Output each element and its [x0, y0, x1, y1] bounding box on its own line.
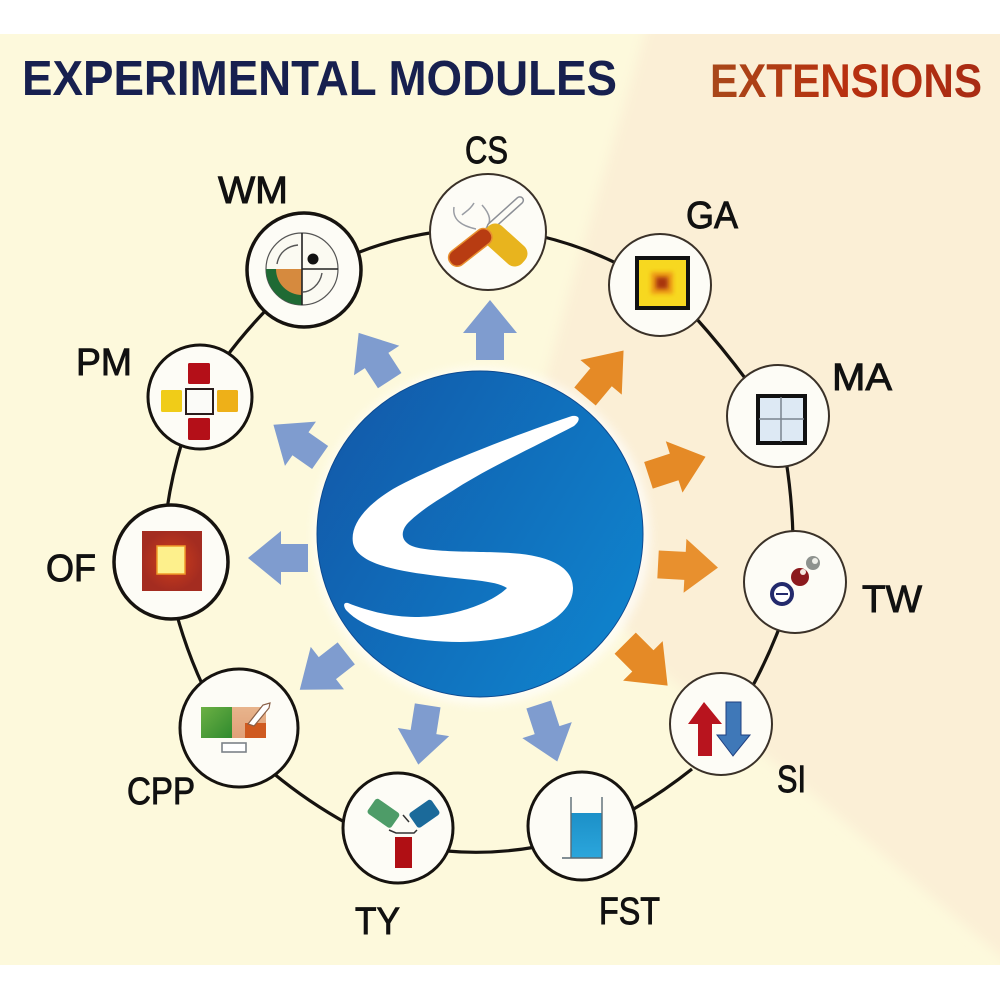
node: GA	[609, 234, 711, 336]
node: CPP	[180, 669, 298, 787]
arrow: to PM	[258, 403, 336, 480]
label: CPP: CPP	[127, 771, 195, 813]
arrow: to GA	[564, 333, 644, 414]
label: CS: CS	[465, 130, 508, 172]
icon: up and down arrows	[688, 702, 750, 756]
label: TY: TY	[355, 901, 400, 943]
label: TW: TW	[862, 579, 922, 621]
node: TW	[744, 531, 846, 633]
node: SI	[670, 673, 772, 775]
label: WM: WM	[218, 170, 288, 212]
arrow: to FST	[514, 696, 582, 770]
label: SI: SI	[777, 759, 806, 801]
connecting ring	[167, 232, 793, 852]
node: FST	[528, 772, 636, 880]
label: PM: PM	[76, 342, 132, 384]
arrow: to CPP	[283, 632, 363, 711]
node: OF	[114, 505, 228, 619]
icon: crossed capsules	[445, 195, 532, 271]
arrow: to TY	[393, 701, 453, 769]
arrow: to TW	[657, 537, 719, 595]
label: MA: MA	[832, 357, 893, 399]
arrow: to SI	[605, 623, 687, 705]
icon: place preference chamber	[201, 703, 270, 752]
label: GA: GA	[686, 195, 739, 237]
icon: three dots	[772, 556, 820, 604]
label: OF: OF	[46, 548, 96, 590]
icon: open field	[142, 531, 202, 591]
node: PM	[148, 345, 252, 449]
icon: water column	[562, 797, 602, 858]
node: MA	[727, 365, 829, 467]
node: TY	[343, 773, 453, 883]
node: CS	[430, 174, 546, 290]
icon: water maze	[266, 233, 338, 305]
node: WM	[247, 213, 361, 327]
title: experimental modules: EXPERIMENTAL MODULES	[22, 52, 617, 106]
icon: window grid	[758, 396, 805, 443]
icon: heat square	[637, 258, 688, 308]
arrow: to WM	[336, 318, 412, 395]
icon: three-way tube	[366, 798, 441, 868]
arrow: to OF	[248, 531, 308, 585]
arrow: to CS	[463, 300, 517, 360]
arrow: to MA	[640, 431, 714, 501]
label: FST: FST	[599, 891, 660, 933]
icon: plus maze	[161, 363, 238, 440]
center logo	[314, 368, 650, 704]
